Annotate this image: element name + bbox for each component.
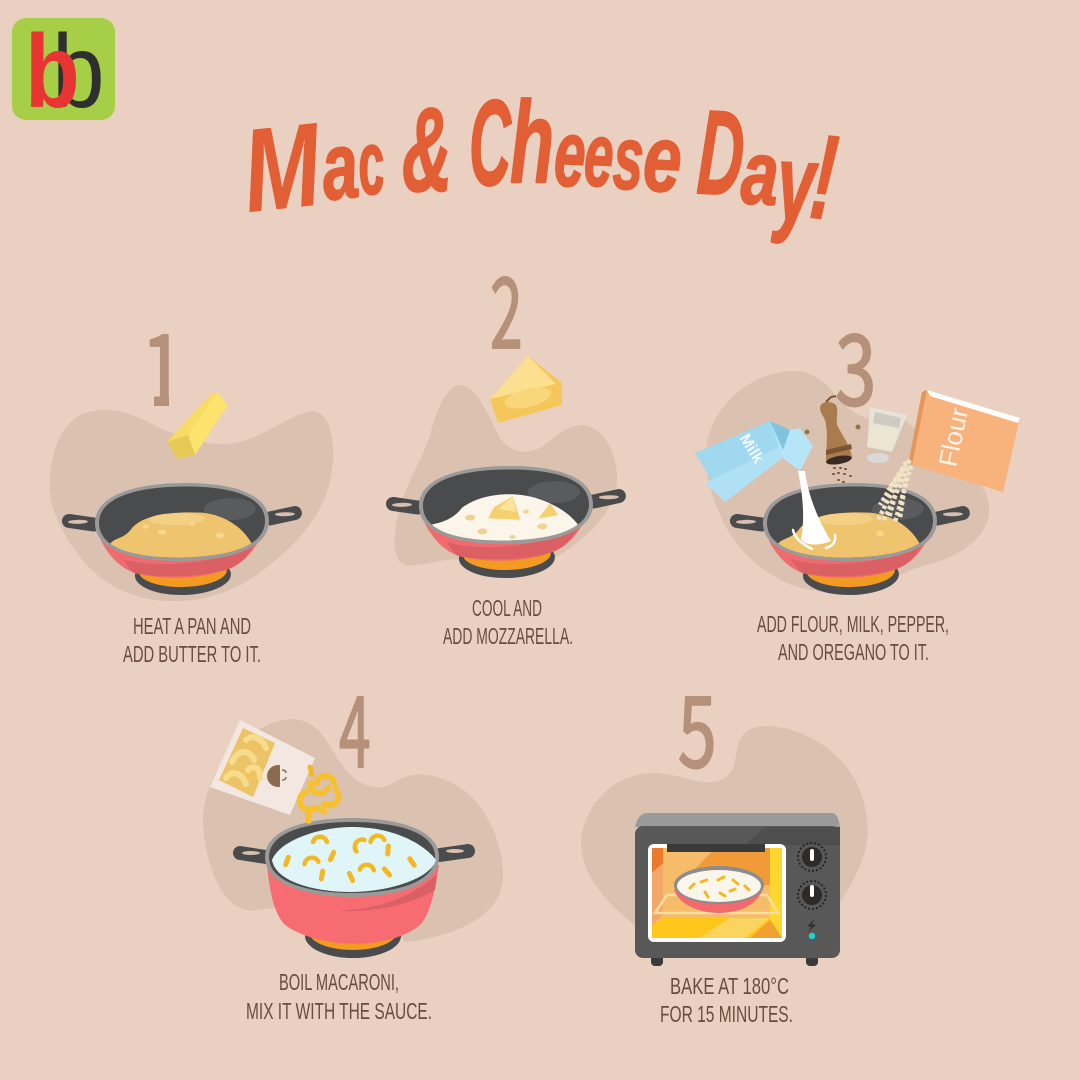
logo: bb: b <box>25 13 80 130</box>
icon: milk stream <box>793 471 835 549</box>
caption: BOIL MACARONI, <box>279 969 399 995</box>
icon: cheese wedge <box>490 356 562 423</box>
title: M <box>237 98 328 238</box>
caption: HEAT A PAN AND <box>133 613 251 639</box>
title: D <box>695 85 748 221</box>
number 4: 4 <box>339 654 371 796</box>
title: e <box>552 100 588 207</box>
icon: salt shaker <box>867 407 907 463</box>
panel: step 5 <box>581 654 868 1027</box>
pot <box>240 818 468 958</box>
panel: step 2 <box>391 235 620 649</box>
caption <box>123 613 261 667</box>
icon: flour box: Flour <box>933 405 974 469</box>
blob 2 <box>395 385 617 566</box>
title: e <box>641 105 684 212</box>
icon: butter <box>167 392 228 459</box>
falling macaroni <box>299 767 342 821</box>
icon: oven <box>635 813 840 966</box>
caption: AND OREGANO TO IT. <box>778 639 929 665</box>
title: s <box>611 108 646 210</box>
blob 3 <box>706 371 989 592</box>
pan with sauce <box>735 481 964 597</box>
blob 1 <box>50 410 333 601</box>
panel: step 4 <box>203 654 503 1024</box>
caption: COOL AND <box>472 595 542 621</box>
icon: flour box <box>909 390 1020 492</box>
caption: BAKE AT 180°C <box>670 973 789 999</box>
pan with white sauce <box>391 464 620 580</box>
caption <box>246 969 432 1024</box>
icon: milk carton <box>695 421 813 502</box>
number 2: 2 <box>490 235 523 377</box>
title: h <box>510 77 554 207</box>
title <box>237 75 843 246</box>
title: C <box>469 75 512 211</box>
panel: step 3 <box>695 333 1020 660</box>
caption <box>757 611 949 665</box>
number 5: 5 <box>678 654 717 796</box>
blob 4 <box>203 719 503 942</box>
title: ! <box>805 110 843 245</box>
pan with melted butter <box>67 481 296 597</box>
caption: ADD BUTTER TO IT. <box>123 641 261 667</box>
panel: step 1 <box>50 334 333 662</box>
caption <box>660 973 793 1027</box>
title: e <box>582 105 616 206</box>
flour falling <box>878 460 911 522</box>
icon: macaroni packet <box>210 720 315 815</box>
title: a <box>739 123 781 225</box>
logo: bb <box>12 13 115 130</box>
title: y <box>771 121 821 246</box>
icon: milk carton: Milk <box>736 431 767 467</box>
number 3: 3 <box>835 292 876 434</box>
icon: pepper mill <box>804 396 860 482</box>
caption: FOR 15 MINUTES. <box>660 1001 793 1027</box>
caption: MIX IT WITH THE SAUCE. <box>246 998 432 1024</box>
title: c <box>353 113 389 215</box>
logo: bb: b <box>52 14 105 130</box>
caption <box>443 595 573 649</box>
title: & <box>402 83 452 217</box>
number 1: 1 <box>141 291 185 434</box>
blob 5 <box>581 726 868 930</box>
caption: ADD MOZZARELLA. <box>443 623 573 649</box>
caption: ADD FLOUR, MILK, PEPPER, <box>757 611 949 637</box>
title: a <box>316 112 363 220</box>
macaroni in water <box>286 835 414 881</box>
